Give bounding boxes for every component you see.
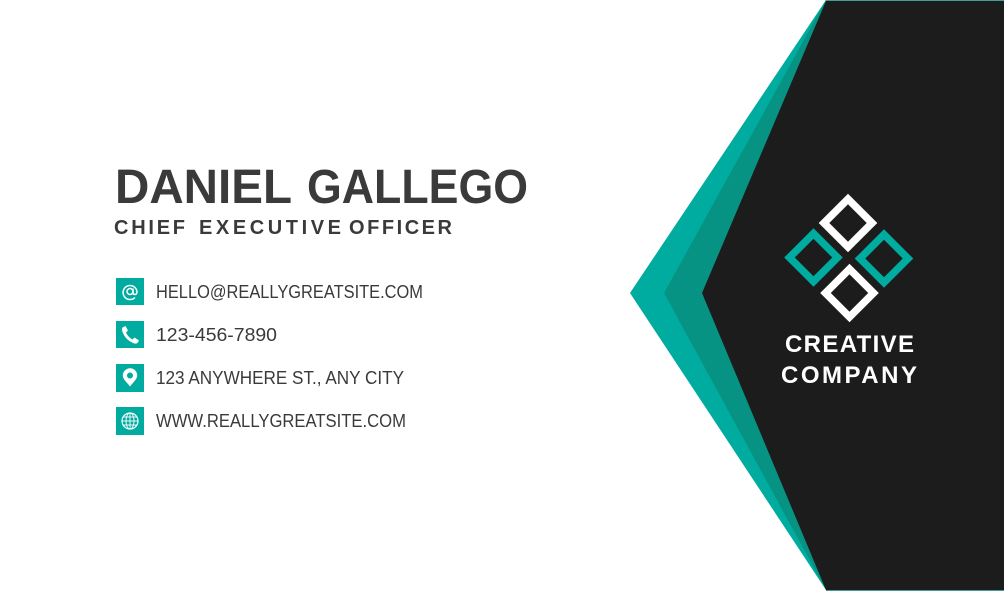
heading: name — [115, 161, 528, 214]
contact row: address — [116, 364, 404, 392]
icon: map pin — [116, 364, 144, 392]
panel: middle teal chevron — [664, 0, 826, 590]
heading: name: GALLEGO — [307, 161, 528, 214]
logo text: creative: CREATIVE — [785, 331, 914, 358]
bottom teal edge line — [826, 590, 1004, 591]
panel: dark logo panel — [702, 1, 1004, 590]
address text: 123 ANYWHERE ST., ANY CITY — [156, 368, 404, 388]
email text: HELLO@REALLYGREATSITE.COM — [156, 282, 423, 302]
heading: job title — [114, 217, 453, 239]
phone text: 123-456-7890 — [156, 325, 277, 345]
heading: job title: CHIEF — [114, 217, 185, 239]
icon: globe — [116, 407, 144, 435]
icon: phone — [116, 321, 144, 348]
icon: top white diamond — [824, 199, 872, 247]
icon: right teal diamond — [860, 234, 908, 282]
heading: job title: EXECUTIVE — [199, 217, 341, 239]
logo text: company: COMPANY — [781, 362, 917, 389]
icon: at sign — [116, 278, 144, 305]
contact row: email — [116, 278, 423, 305]
icon: bottom white diamond — [826, 269, 874, 317]
icon: left teal diamond — [790, 234, 838, 282]
logo: diamonds — [790, 199, 908, 317]
heading: name: DANIEL — [115, 161, 292, 214]
contact row: phone — [116, 321, 277, 348]
website text: WWW.REALLYGREATSITE.COM — [156, 411, 406, 431]
top teal edge line — [826, 0, 1004, 1]
panel: outer teal chevron — [630, 0, 826, 590]
contact row: website — [116, 407, 406, 435]
heading: job title: OFFICER — [349, 217, 453, 239]
